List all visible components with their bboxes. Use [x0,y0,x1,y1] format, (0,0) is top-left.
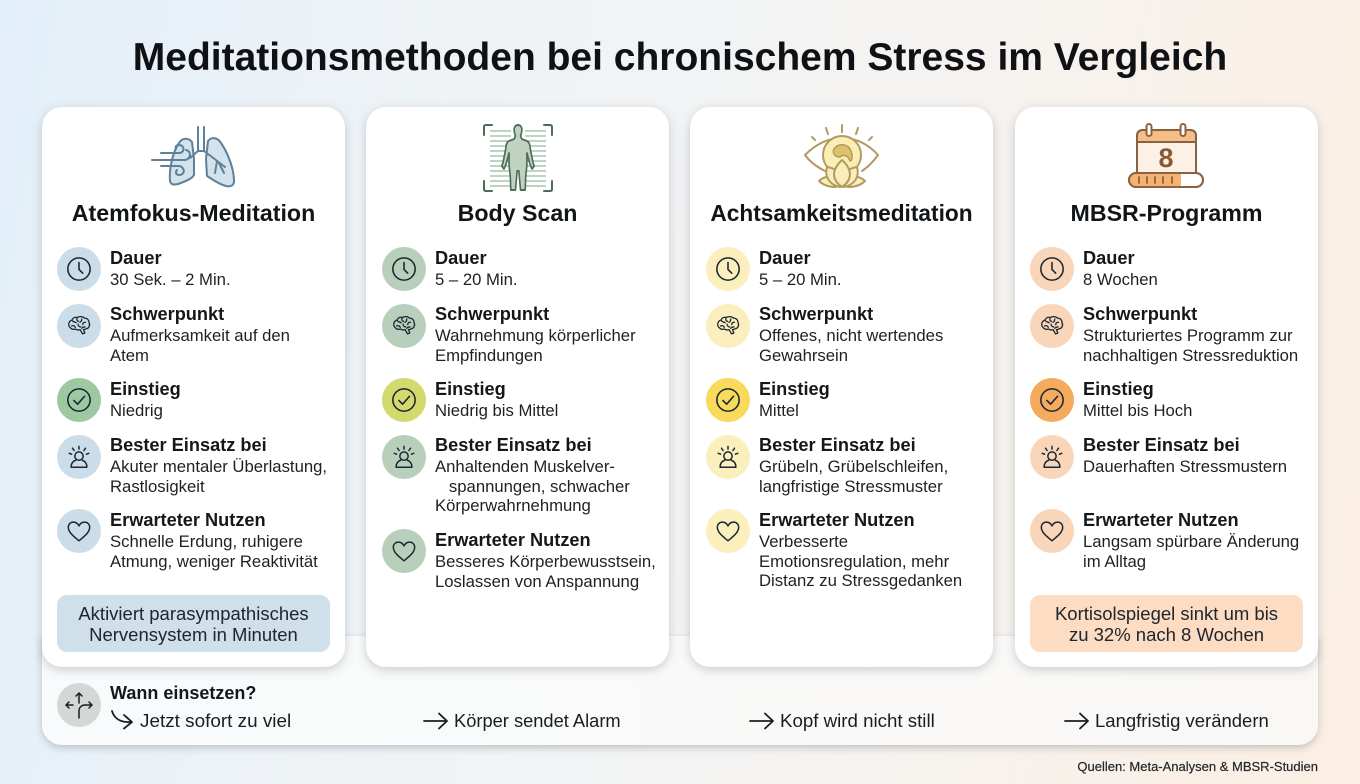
title: Meditationsmethoden bei chronischem Stress im Vergleich [133,36,1227,79]
row: Bester Einsatz bei [706,435,948,496]
row: Einstieg: Mittel [759,401,799,420]
row: Dauer: 8 Wochen [1083,270,1158,289]
row: Schwerpunkt: Schwerpunkt [1083,304,1197,324]
row: Bester Einsatz bei [382,435,630,515]
arrow label: restless mind: Kopf wird nicht still [780,710,935,731]
row: Erwarteter Nutzen: Distanz zu Stressgedanken [759,571,962,590]
row: Dauer: 5 – 20 Min. [435,270,518,289]
label: when to use: Wann einsetzen? [110,683,256,703]
row: Schwerpunkt [382,304,636,365]
panel: Body Scan [366,107,669,667]
row: Dauer [706,247,842,291]
row: Dauer: 30 Sek. – 2 Min. [110,270,231,289]
icon: lungs with breath [151,126,235,188]
row: Dauer [1030,247,1158,291]
row: Bester Einsatz bei: Rastlosigkeit [110,477,205,496]
sources: Quellen: Meta-Analysen & MBSR-Studien [1077,759,1318,774]
row: Bester Einsatz bei: spannungen, schwacher [449,477,630,496]
row: Dauer [57,247,231,291]
row: Einstieg: Einstieg [759,379,830,399]
panel: when to use [42,636,1318,745]
row: Schwerpunkt: Gewahrsein [759,346,848,365]
row: Schwerpunkt: Empfindungen [435,346,543,365]
row: Bester Einsatz bei: langfristige Stressmuster [759,477,943,496]
row: Schwerpunkt: Atem [110,346,149,365]
row: Dauer: Dauer [110,248,162,268]
row: Erwarteter Nutzen: Erwarteter Nutzen [435,530,591,550]
heading: Achtsamkeitsmeditation [710,200,973,226]
row: Erwarteter Nutzen [1030,509,1299,571]
icon: direction arrows [57,683,101,727]
panel: Atemfokus-Meditation [42,107,345,667]
row: Erwarteter Nutzen: Schnelle Erdung, ruhigere [110,532,303,551]
row: Erwarteter Nutzen: Erwarteter Nutzen [110,510,266,530]
row: Bester Einsatz bei: Bester Einsatz bei [435,435,592,455]
row: Dauer: 5 – 20 Min. [759,270,842,289]
row: Schwerpunkt: Wahrnehmung körperlicher [435,326,636,345]
icon: calendar with progress bar: 8 [1158,143,1174,173]
row: Schwerpunkt: Schwerpunkt [110,304,224,324]
row: Bester Einsatz bei [1030,435,1287,479]
row: Einstieg: Niedrig [110,401,163,420]
row: Erwarteter Nutzen [382,529,656,591]
row: Schwerpunkt [1030,304,1298,365]
row: Schwerpunkt [706,304,943,365]
row: Erwarteter Nutzen: Erwarteter Nutzen [759,510,915,530]
row: Erwarteter Nutzen: Besseres Körperbewusstsein, [435,552,656,571]
icon: calendar with progress bar [1128,123,1204,188]
panel: MBSR-Programm [1015,107,1318,667]
row: Schwerpunkt: nachhaltigen Stressreduktion [1083,346,1298,365]
callout: Aktiviert parasympathisches [78,603,309,624]
row: Einstieg [382,378,558,422]
arrow label: long-term change: Langfristig verändern [1095,710,1269,731]
row: Erwarteter Nutzen [706,509,962,590]
row: Erwarteter Nutzen: Emotionsregulation, mehr [759,552,949,571]
row: Einstieg [706,378,830,422]
row: Einstieg [1030,378,1192,422]
row: Dauer: Dauer [1083,248,1135,268]
heading: MBSR-Programm [1071,200,1262,226]
row: Einstieg [57,378,181,422]
row: Erwarteter Nutzen: Loslassen von Anspannung [435,572,639,591]
row: Schwerpunkt: Aufmerksamkeit auf den [110,326,290,345]
row: Bester Einsatz bei: Bester Einsatz bei [110,435,267,455]
row: Einstieg: Einstieg [435,379,506,399]
row: Schwerpunkt: Schwerpunkt [759,304,873,324]
row: Einstieg: Mittel bis Hoch [1083,401,1192,420]
callout [1030,595,1303,652]
row: Dauer [382,247,518,291]
row: Erwarteter Nutzen [57,509,318,571]
row: Bester Einsatz bei: Dauerhaften Stressmustern [1083,457,1287,476]
callout: zu 32% nach 8 Wochen [1069,624,1264,645]
row: Bester Einsatz bei: Grübeln, Grübelschleifen, [759,457,948,476]
row: Erwarteter Nutzen: Verbesserte [759,532,848,551]
callout: Nervensystem in Minuten [89,624,298,645]
row: Schwerpunkt: Offenes, nicht wertendes [759,326,943,345]
callout: Kortisolspiegel sinkt um bis [1055,603,1278,624]
row: Dauer: Dauer [435,248,487,268]
row: Schwerpunkt: Schwerpunkt [435,304,549,324]
row: Bester Einsatz bei: Bester Einsatz bei [1083,435,1240,455]
row: Erwarteter Nutzen: im Alltag [1083,552,1146,571]
row: Bester Einsatz bei: Körperwahrnehmung [435,496,591,515]
arrow label: body alarm: Körper sendet Alarm [454,710,621,731]
row: Bester Einsatz bei: Anhaltenden Muskelver- [435,457,615,476]
row: Bester Einsatz bei: Bester Einsatz bei [759,435,916,455]
row: Schwerpunkt [57,304,290,365]
row: Dauer: Dauer [759,248,811,268]
heading: Atemfokus-Meditation [72,200,315,226]
row: Erwarteter Nutzen: Langsam spürbare Änderung [1083,532,1299,551]
row: Einstieg: Niedrig bis Mittel [435,401,558,420]
icon: eye with lotus [804,124,879,188]
callout [57,595,330,652]
arrow label: right now: Jetzt sofort zu viel [140,711,291,732]
icon: body scan [483,124,553,192]
row: Bester Einsatz bei [57,435,327,496]
row: Erwarteter Nutzen: Erwarteter Nutzen [1083,510,1239,530]
panel: Achtsamkeitsmeditation [690,107,993,667]
row: Einstieg: Einstieg [110,379,181,399]
row: Schwerpunkt: Strukturiertes Programm zur [1083,326,1293,345]
row: Einstieg: Einstieg [1083,379,1154,399]
row: Erwarteter Nutzen: Atmung, weniger Reaktivität [110,552,318,571]
row: Bester Einsatz bei: Akuter mentaler Überlastung, [110,457,327,476]
heading: Body Scan [458,200,577,226]
